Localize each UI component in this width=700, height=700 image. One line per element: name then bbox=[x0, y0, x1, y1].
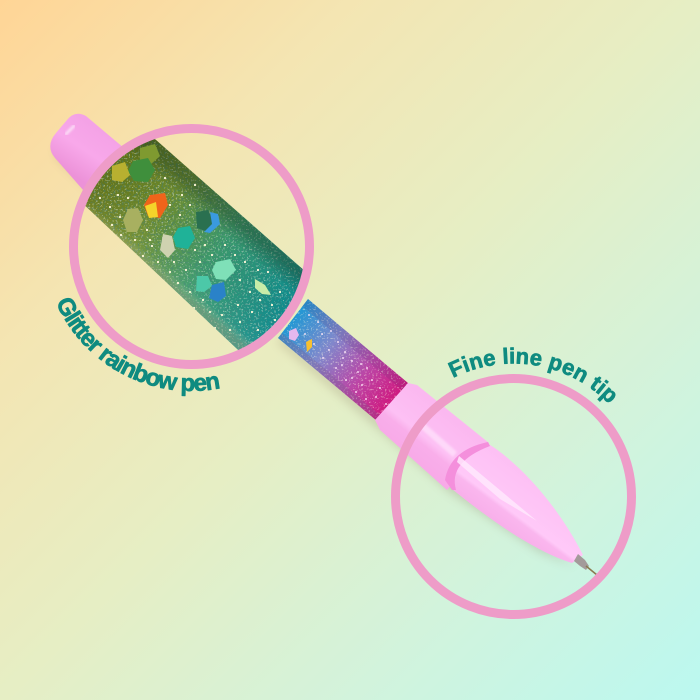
sequin: blue bbox=[204, 212, 220, 233]
ring: glitter rainbow pen bbox=[74, 128, 310, 364]
sequin: dark green bbox=[196, 210, 212, 231]
pen tip cone bbox=[445, 442, 583, 563]
sequin: small pink bbox=[289, 328, 299, 341]
sequin: teal bbox=[173, 226, 195, 249]
sequin: small gold bbox=[306, 339, 312, 352]
sequin: pearl bbox=[123, 208, 143, 232]
bright glitter flecks bbox=[100, 178, 280, 330]
label: fine line pen tip: Fine line pen tip bbox=[448, 347, 616, 402]
pen needle tip bbox=[574, 554, 597, 575]
pen cap bbox=[50, 114, 150, 215]
small glitter barrel bbox=[278, 299, 408, 420]
ring: fine line pen tip bbox=[396, 378, 632, 614]
sequin: small pearl bbox=[255, 279, 271, 295]
sequin: mint bbox=[196, 276, 212, 292]
sequin: yellow flare bbox=[145, 202, 158, 218]
pen collar bbox=[375, 383, 489, 490]
pen shadow bbox=[55, 145, 575, 566]
sequin: white bbox=[160, 234, 175, 258]
sequin: gold bbox=[112, 162, 130, 182]
sequin: deep blue bbox=[209, 282, 226, 302]
magnified glitter barrel bbox=[86, 139, 303, 350]
sequin: green bbox=[128, 158, 155, 182]
label: glitter rainbow pen: Glitter rainbow pen bbox=[58, 298, 220, 396]
sequin: orange bbox=[144, 193, 168, 218]
sequin: olive bbox=[140, 144, 160, 165]
sequin: aqua bbox=[212, 259, 236, 280]
